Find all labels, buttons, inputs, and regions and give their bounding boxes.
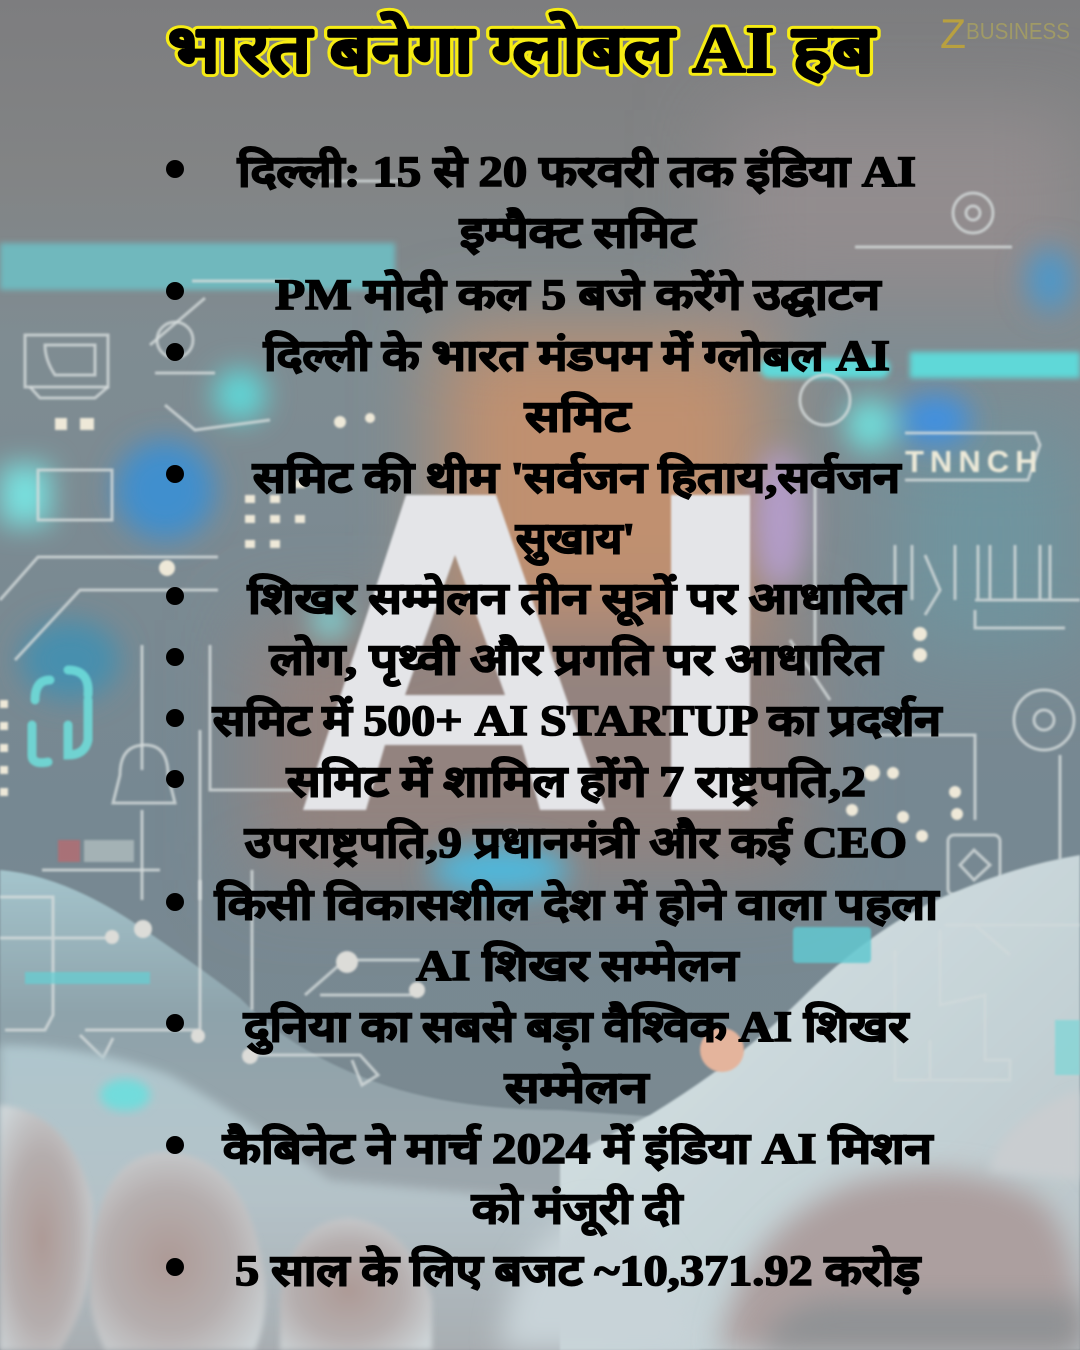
title: भारत बनेगा ग्लोबल AI हब xyxy=(168,11,877,87)
item 5 xyxy=(166,573,907,626)
item 4: समिट की थीम 'सर्वजन हिताय,सर्वजन xyxy=(252,452,902,502)
item 10 xyxy=(166,1001,910,1112)
item 1 xyxy=(166,146,916,257)
left ribbon xyxy=(0,870,700,1350)
item 9: AI शिखर सम्मेलन xyxy=(416,940,740,990)
AI letters in background xyxy=(303,495,750,810)
item 7: समिट में 500+ AI STARTUP का प्रदर्शन xyxy=(212,695,943,745)
item 3: समिट xyxy=(524,391,632,441)
item 12: 5 साल के लिए बजट ~10,371.92 करोड़ xyxy=(235,1245,922,1295)
logo: Z Business: Z xyxy=(940,10,966,57)
teal light bands xyxy=(0,243,1080,378)
item 8 xyxy=(166,756,907,867)
item 3: दिल्ली के भारत मंडपम में ग्लोबल AI xyxy=(263,330,890,380)
item 11: कैबिनेट ने मार्च 2024 में इंडिया AI मिशन xyxy=(222,1123,934,1173)
item 2: PM मोदी कल 5 बजे करेंगे उद्घाटन xyxy=(275,269,882,319)
bullet list xyxy=(166,146,943,1295)
item 9: किसी विकासशील देश में होने वाला पहला xyxy=(214,879,940,929)
right chart lines xyxy=(895,925,1080,1080)
lower left palm xyxy=(0,1045,640,1350)
item 4: सुखाय' xyxy=(515,516,635,566)
small orange node xyxy=(700,1028,744,1072)
item 11: को मंजूरी दी xyxy=(471,1183,684,1236)
item 2 xyxy=(166,269,882,319)
bright dots xyxy=(0,413,963,842)
item 8: उपराष्ट्रपति,9 प्रधानमंत्री और कई CEO xyxy=(244,817,907,867)
circuit lines and gadgets xyxy=(0,181,1080,900)
teal CD glyphs xyxy=(32,670,88,763)
teal badge xyxy=(793,927,871,963)
item 9 xyxy=(166,879,940,990)
circuit lines and gadgets: TNNCH xyxy=(905,444,1044,479)
item 10: सम्मेलन xyxy=(504,1062,651,1112)
item 3 xyxy=(166,330,890,441)
fingers xyxy=(0,1105,93,1350)
title: भारत बनेगा ग्लोबल AI हब xyxy=(168,11,877,87)
item 1: दिल्ली: 15 से 20 फरवरी तक इंडिया AI xyxy=(237,146,916,196)
item 4 xyxy=(166,452,902,566)
right palm xyxy=(560,855,1080,1350)
logo: Z Business: BUSINESS xyxy=(966,18,1070,44)
item 6 xyxy=(166,634,884,687)
item 8: समिट में शामिल होंगे 7 राष्ट्रपति,2 xyxy=(286,756,866,806)
item 5: शिखर सम्मेलन तीन सूत्रों पर आधारित xyxy=(247,573,907,626)
item 1: इम्पैक्ट समिट xyxy=(459,207,697,257)
item 11 xyxy=(166,1123,934,1236)
item 6: लोग, पृथ्वी और प्रगति पर आधारित xyxy=(269,634,884,687)
logo: Z Business xyxy=(940,10,1070,57)
item 10: दुनिया का सबसे बड़ा वैश्विक AI शिखर xyxy=(243,1001,910,1055)
hands at bottom xyxy=(0,855,1080,1350)
circuitry over left ribbon xyxy=(0,870,425,1085)
